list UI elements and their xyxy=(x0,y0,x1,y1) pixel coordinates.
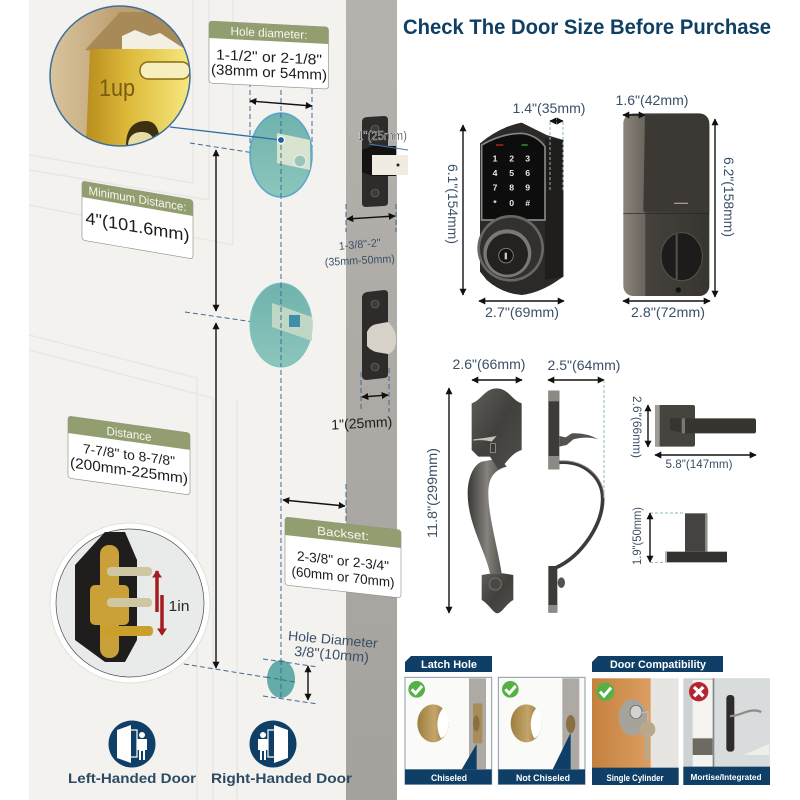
keypad digits: * xyxy=(493,198,497,208)
dimension: lock back: 1.6"(42mm) xyxy=(616,92,688,108)
callout: minimum distance: 4"(101.6mm) xyxy=(86,209,190,245)
guide lines xyxy=(184,82,346,682)
card: mortise integrated: Mortise/Integrated xyxy=(690,772,762,782)
dimension: handle xyxy=(424,356,620,613)
keypad digits: 4 xyxy=(493,168,498,178)
latch edge plate xyxy=(362,290,396,380)
latch cross bore hole xyxy=(250,283,312,367)
callout: backset: 2-3/8" or 2-3/4" xyxy=(297,548,389,574)
dimension: lever projection xyxy=(630,507,650,565)
keypad digits: 7 xyxy=(493,183,498,193)
banner: latch hole: Latch Hole xyxy=(421,659,477,671)
exterior handle side view xyxy=(548,391,604,613)
dimension: faceplate xyxy=(325,204,396,269)
dimension: faceplate: 1-3/8"-2" xyxy=(338,237,381,253)
label: small hole diameter xyxy=(286,628,379,666)
icon: left-handed door xyxy=(108,720,156,768)
dimension: lever xyxy=(630,396,756,471)
dimension: lock back xyxy=(616,92,737,320)
keypad digits: 0 xyxy=(509,198,514,208)
distance arrows xyxy=(216,101,345,700)
small hole xyxy=(263,659,318,704)
keypad digits: 5 xyxy=(509,168,514,178)
keypad digits: 3 xyxy=(525,153,530,163)
label: bolt size: 1"(25mm) xyxy=(357,129,407,143)
dimension: lock front: 1.4"(35mm) xyxy=(512,100,586,116)
dimension: lock back: 2.8"(72mm) xyxy=(631,304,705,320)
callout: backset xyxy=(285,517,401,598)
title: Check The Door Size Before Purchase xyxy=(403,16,771,39)
keypad digits: 9 xyxy=(525,183,530,193)
smart lock front view xyxy=(477,123,563,295)
callout: backset: (60mm or 70mm) xyxy=(291,564,394,590)
keypad digits: 1 xyxy=(493,153,498,163)
magnifier: mounting posts 1in: 1in xyxy=(168,598,190,615)
interior lever side view xyxy=(650,513,727,562)
guide post top xyxy=(107,567,152,576)
interior lever top view xyxy=(655,405,756,447)
magnifier: gold latch detail: 1up xyxy=(99,75,135,102)
icon: right-handed door xyxy=(250,720,296,768)
dimension: handle: 2.6"(66mm) xyxy=(452,356,526,372)
dimension: faceplate: (35mm-50mm) xyxy=(325,253,395,269)
card: single cylinder xyxy=(592,678,679,785)
dimension: latch plate xyxy=(331,368,393,433)
card: not chiseled xyxy=(498,677,585,784)
keypad digits: 2 xyxy=(509,153,514,163)
keypad digits: 6 xyxy=(525,168,530,178)
deadbolt cross bore hole xyxy=(250,113,312,197)
dimension: handle: 2.5"(64mm) xyxy=(548,357,620,373)
exterior handle front view xyxy=(468,388,522,613)
callout: hole diameter: (38mm or 54mm) xyxy=(211,62,327,84)
label: small hole diameter: Hole Diameter xyxy=(287,628,379,651)
magnifier: mounting posts 1in xyxy=(50,523,210,683)
dimension: lever projection: 1.9"(50mm) xyxy=(630,507,644,565)
callout: hole diameter: 1-1/2" or 2-1/8" xyxy=(216,47,322,69)
deadbolt edge plate xyxy=(362,116,408,207)
card: not chiseled: Not Chiseled xyxy=(516,773,570,783)
card: single cylinder: Single Cylinder xyxy=(606,773,664,783)
banner: door compatibility xyxy=(592,656,723,672)
dimension: lock front xyxy=(445,100,586,320)
callout: distance: Distance xyxy=(106,424,152,444)
callout: backset: Backset: xyxy=(317,524,369,543)
magnifier: gold latch detail xyxy=(50,6,190,146)
label: bolt size xyxy=(357,129,408,150)
callout: minimum distance: Minimum Distance: xyxy=(89,184,186,214)
dimension: handle: 11.8"(299mm) xyxy=(424,448,440,538)
door edge xyxy=(346,0,397,800)
dimension: lock front: 6.1"(154mm) xyxy=(445,164,461,244)
dimension: lever: 2.6"(66mm) xyxy=(630,396,644,458)
label: small hole diameter: 3/8"(10mm) xyxy=(294,643,370,665)
callout: distance: 7-7/8" to 8-7/8" xyxy=(83,441,175,469)
dimension: latch plate: 1"(25mm) xyxy=(331,413,393,433)
callout: hole diameter xyxy=(209,21,328,89)
banner: latch hole xyxy=(405,656,492,672)
callout: distance: (200mm-225mm) xyxy=(70,455,188,488)
callout: distance xyxy=(68,416,190,495)
label: right-handed door: Right-Handed Door xyxy=(211,770,353,786)
banner: door compatibility: Door Compatibility xyxy=(610,659,707,671)
dimension: lock back: 6.2"(158mm) xyxy=(721,157,737,237)
keypad digits: # xyxy=(525,198,530,208)
callout: hole diameter: Hole diameter: xyxy=(231,24,308,42)
magnifier pointer xyxy=(170,127,284,144)
label: left-handed door: Left-Handed Door xyxy=(68,770,197,786)
door face xyxy=(29,0,347,800)
keypad digits xyxy=(493,153,530,208)
card: chiseled: Chiseled xyxy=(431,773,467,783)
keypad digits: 8 xyxy=(509,183,514,193)
dimension: lock front: 2.7"(69mm) xyxy=(485,304,559,320)
card: mortise integrated xyxy=(683,678,770,785)
smart lock back view xyxy=(623,113,709,296)
dimension: lever: 5.8"(147mm) xyxy=(666,457,732,471)
card: chiseled xyxy=(405,677,492,784)
callout: minimum distance xyxy=(82,181,193,259)
